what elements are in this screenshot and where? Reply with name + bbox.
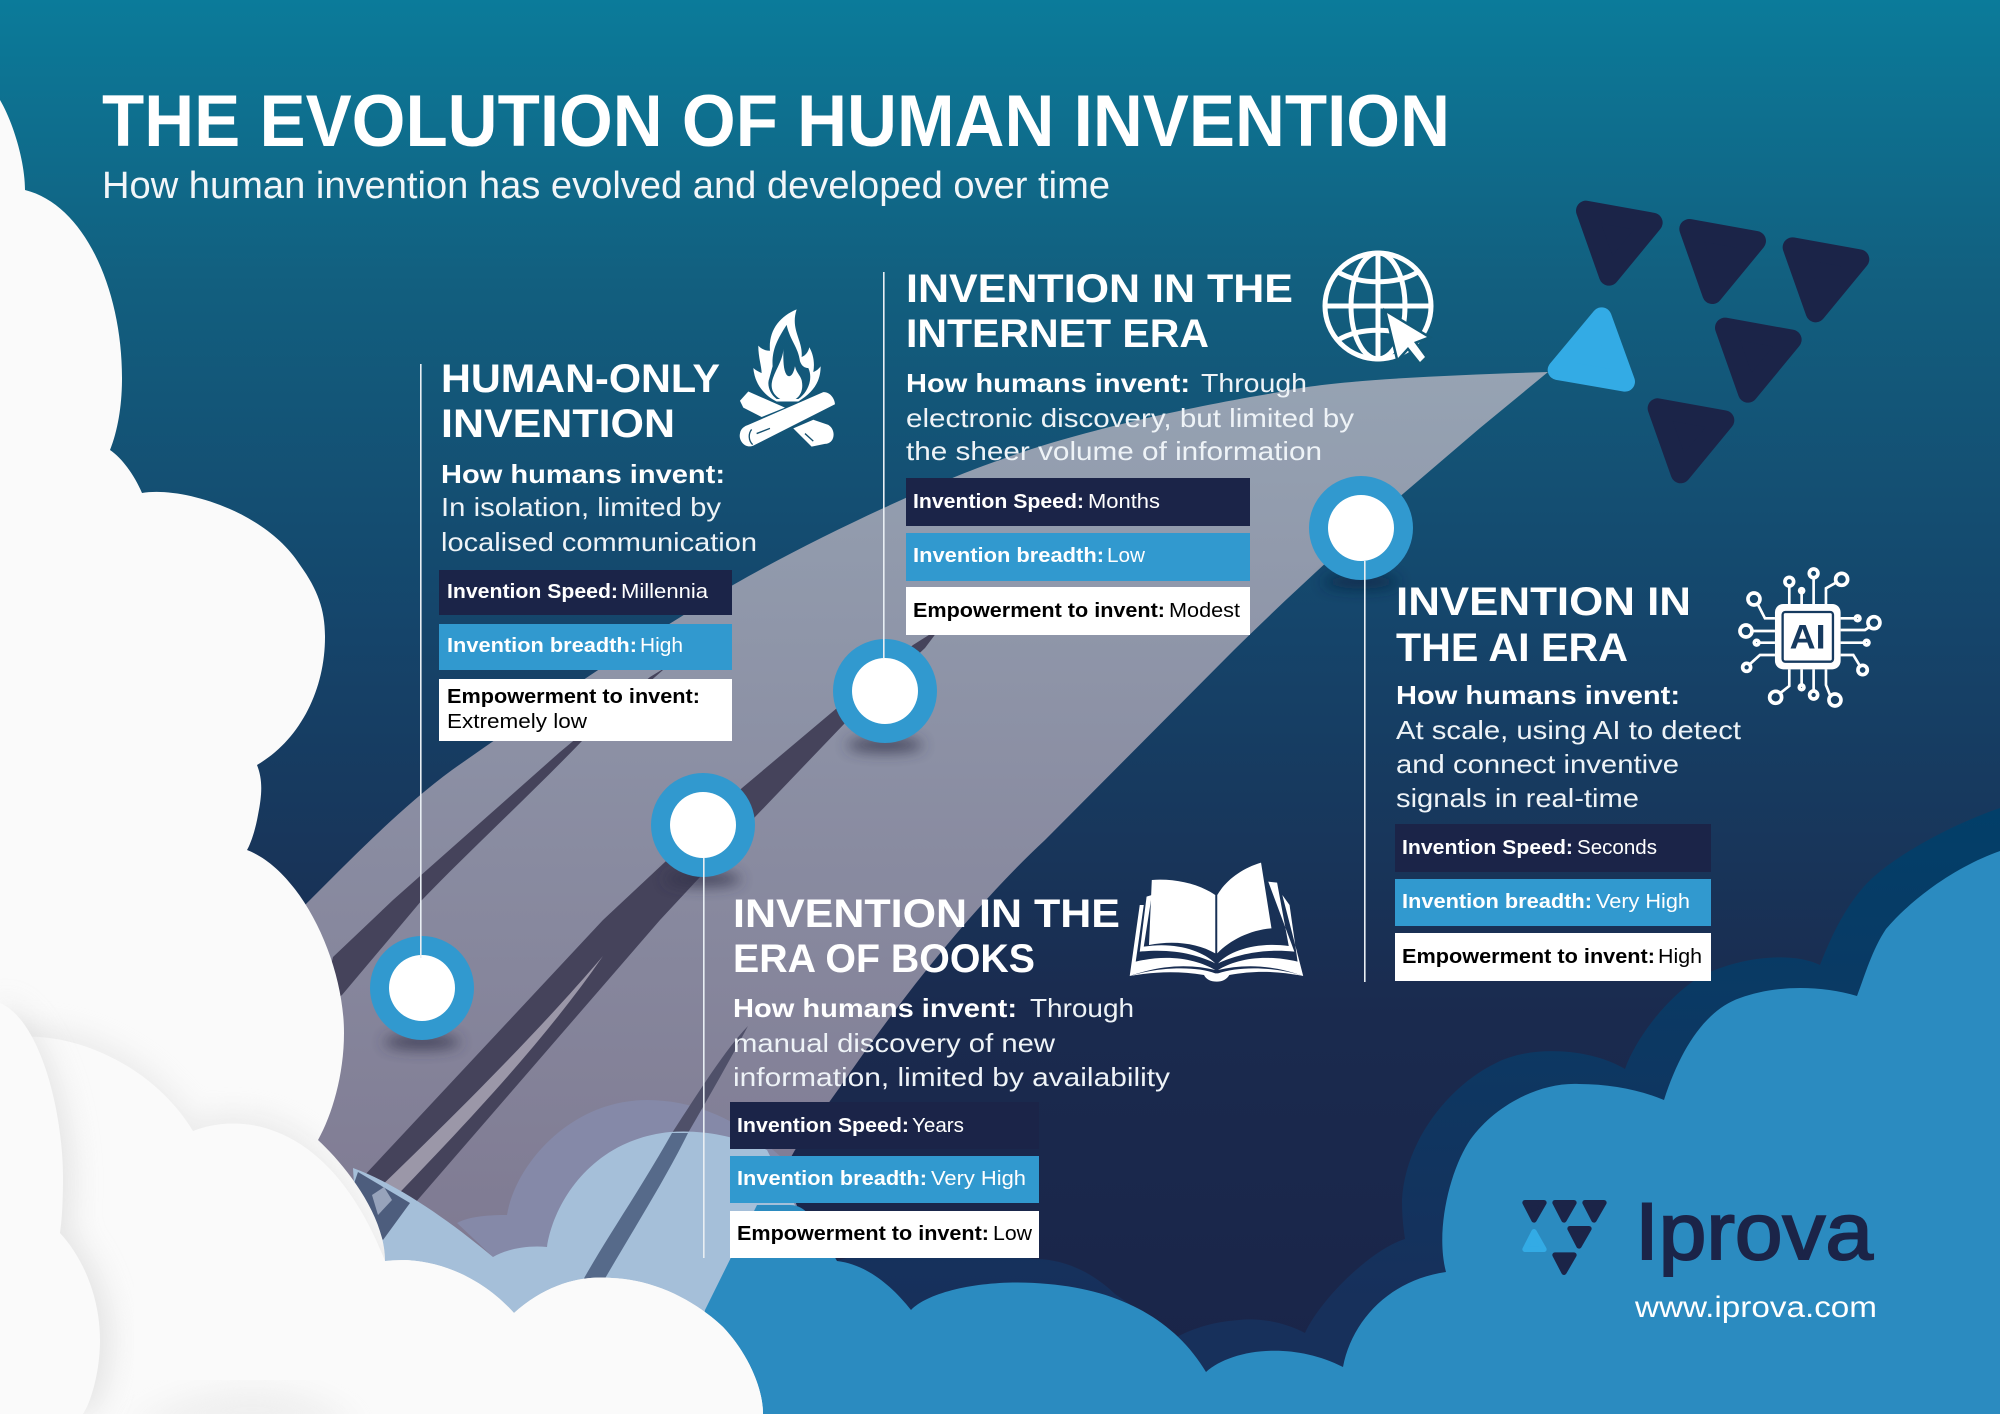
stat: invention breadth: Invention breadth: xyxy=(447,635,637,657)
stat: invention breadth: Invention breadth: xyxy=(913,545,1104,567)
panel: AI era xyxy=(1395,569,1880,981)
heading: ERA OF BOOKS xyxy=(733,937,1035,981)
stat: invention speed: Invention Speed: xyxy=(447,581,618,603)
heading: INVENTION xyxy=(441,402,675,446)
icon: campfire xyxy=(740,309,835,447)
heading xyxy=(906,267,1293,356)
stat: invention breadth xyxy=(730,1156,1039,1203)
beam streak: central band xyxy=(350,628,940,1240)
stat: invention speed xyxy=(906,478,1250,526)
how humans invent text: How humans invent: xyxy=(906,368,1190,398)
stat: invention breadth: Low xyxy=(1107,545,1146,567)
heading: INVENTION IN THE xyxy=(733,892,1120,936)
stat: invention breadth xyxy=(906,533,1250,581)
how humans invent text: and connect inventive xyxy=(1396,749,1679,779)
connector line 4 xyxy=(1364,561,1366,982)
marker 1: human-only xyxy=(370,936,474,1049)
beam streak: upper xyxy=(320,666,668,1010)
panel: internet era xyxy=(906,253,1431,635)
stat: invention speed: Invention Speed: xyxy=(737,1115,909,1137)
stat: empowerment: Extremely low xyxy=(447,711,588,733)
how humans invent text: Through xyxy=(1201,368,1307,398)
heading: INVENTION IN THE xyxy=(906,267,1293,311)
stat: empowerment: Empowerment to invent: xyxy=(1402,946,1655,968)
stat: empowerment: Empowerment to invent: xyxy=(447,686,700,708)
heading xyxy=(733,892,1120,981)
stat: invention breadth xyxy=(439,624,732,670)
stat: invention breadth: Invention breadth: xyxy=(737,1168,927,1190)
how humans invent text: the sheer volume of information xyxy=(906,436,1322,466)
how humans invent text xyxy=(441,459,757,557)
how humans invent text: How humans invent: xyxy=(733,993,1017,1023)
streak overlays on pale cloud xyxy=(350,1172,410,1240)
front cloud, mid blue xyxy=(690,851,2000,1414)
stat: invention breadth: Very High xyxy=(931,1168,1026,1190)
comet beam trail xyxy=(300,372,1548,1350)
stat: invention speed xyxy=(1395,824,1711,872)
stat: invention speed xyxy=(439,570,732,615)
website url: www.iprova.com xyxy=(1634,1291,1877,1324)
title: THE EVOLUTION OF HUMAN INVENTION xyxy=(102,81,1450,162)
logo wordmark: Iprova xyxy=(1635,1187,1874,1277)
how humans invent text xyxy=(906,368,1354,466)
stat: empowerment: Empowerment to invent: xyxy=(913,600,1165,622)
connector line 3 xyxy=(883,272,885,658)
connector line 2 xyxy=(703,858,705,1258)
marker 2: books xyxy=(651,773,755,886)
stat: invention speed: Years xyxy=(912,1115,964,1137)
stat: invention speed: Millennia xyxy=(621,581,709,603)
connector line 1 xyxy=(420,364,422,958)
stat: invention breadth: High xyxy=(640,635,683,657)
stat: invention speed: Seconds xyxy=(1577,837,1657,859)
how humans invent text: At scale, using AI to detect xyxy=(1396,715,1742,745)
how humans invent text: How humans invent: xyxy=(441,459,725,489)
how humans invent text: information, limited by availability xyxy=(733,1062,1170,1092)
heading: INVENTION IN xyxy=(1396,580,1691,624)
stat: empowerment: Modest xyxy=(1169,600,1240,622)
stat: empowerment: High xyxy=(1658,946,1702,968)
beam streak: light sliver xyxy=(372,956,603,1215)
icon: triangle cluster with comet head xyxy=(1558,211,1859,473)
stat: empowerment xyxy=(439,679,732,741)
heading xyxy=(1396,580,1691,670)
icon: AI chip: AI xyxy=(1790,618,1826,656)
icon: AI chip xyxy=(1740,569,1880,706)
icon: logo triangles xyxy=(1525,1203,1604,1272)
how humans invent text: How humans invent: xyxy=(1396,680,1680,710)
icon: globe with cursor xyxy=(1325,253,1431,362)
cloud behind beam, pale blue xyxy=(353,1131,800,1350)
icon: open book xyxy=(1130,863,1303,982)
beam streak: thin lower, over pale cloud xyxy=(582,1133,688,1282)
heading: INTERNET ERA xyxy=(906,312,1209,356)
how humans invent text: signals in real-time xyxy=(1396,783,1639,813)
stat: invention speed: Invention Speed: xyxy=(1402,837,1573,859)
marker 4: AI xyxy=(1309,476,1413,589)
heading: THE AI ERA xyxy=(1396,626,1628,670)
stat: invention speed: Invention Speed: xyxy=(913,491,1084,513)
logo: Iprova xyxy=(1525,1187,1874,1277)
stat: empowerment: Empowerment to invent: xyxy=(737,1223,989,1245)
how humans invent text xyxy=(733,993,1170,1092)
heading: HUMAN-ONLY xyxy=(441,357,720,401)
stat: empowerment xyxy=(1395,933,1711,981)
how humans invent text: Through xyxy=(1030,993,1134,1023)
back cloud layer, dark blue xyxy=(760,808,2000,1414)
stat: invention breadth xyxy=(1395,879,1711,926)
heading xyxy=(441,357,720,446)
panel: human-only invention xyxy=(439,309,835,741)
stat: empowerment xyxy=(730,1211,1039,1258)
subtitle: How human invention has evolved and developed over time xyxy=(102,165,1110,207)
how humans invent text: electronic discovery, but limited by xyxy=(906,403,1354,433)
stat: empowerment xyxy=(906,587,1250,635)
panel: era of books xyxy=(730,863,1303,1258)
beam streak: thin lower, over grey cloud xyxy=(672,1026,748,1133)
how humans invent text: In isolation, limited by xyxy=(441,492,721,522)
how humans invent text xyxy=(1396,680,1742,813)
white cloud mass xyxy=(0,80,800,1414)
stat: invention breadth: Invention breadth: xyxy=(1402,891,1592,913)
stat: invention breadth: Very High xyxy=(1596,891,1690,913)
how humans invent text: manual discovery of new xyxy=(733,1028,1055,1058)
marker 3: internet xyxy=(833,639,937,752)
stat: empowerment: Low xyxy=(993,1223,1033,1245)
stat: invention speed xyxy=(730,1102,1039,1149)
stat: invention speed: Months xyxy=(1088,491,1160,513)
cloud behind beam, grey blue xyxy=(457,1100,800,1330)
how humans invent text: localised communication xyxy=(441,527,757,557)
